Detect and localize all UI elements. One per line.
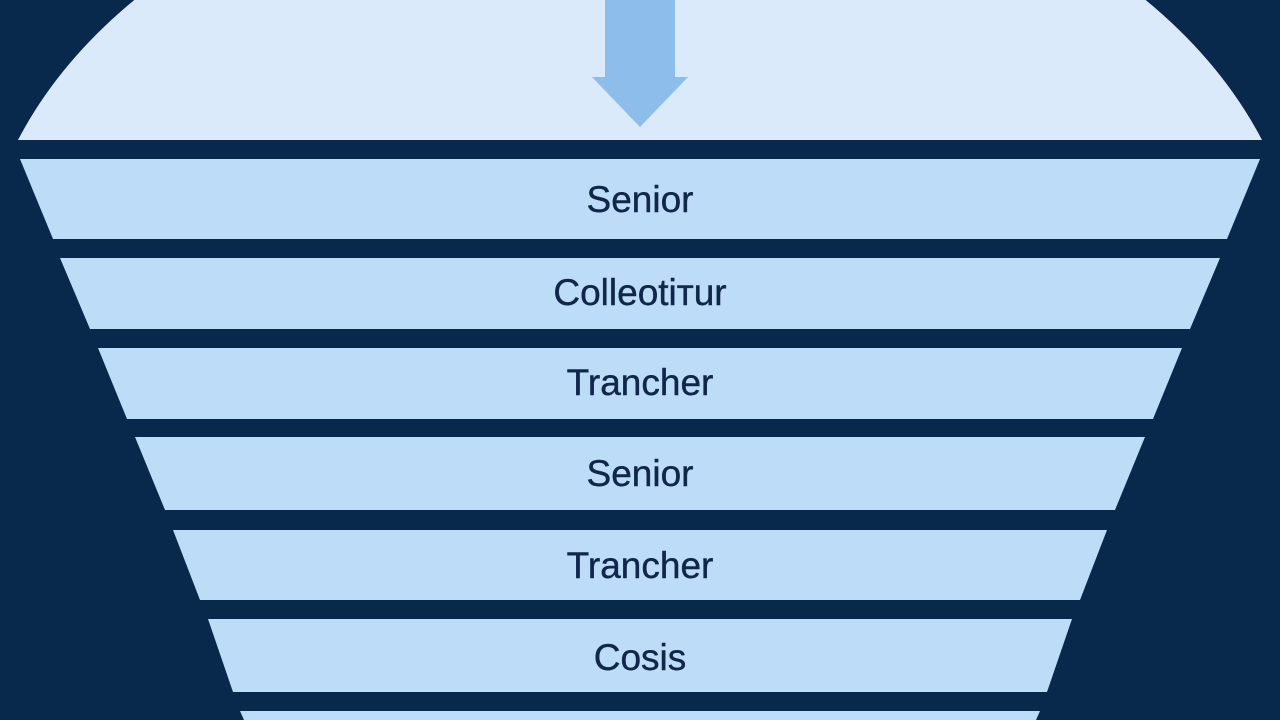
band 2: Colleotiтur [60,258,1220,329]
band 4: Senior [135,437,1145,510]
arrow: down [592,0,688,127]
band 2: Colleotiтur: Colleotiтur [553,272,727,313]
band 5: Trancher: Trancher [567,545,713,586]
band 3: Trancher [98,348,1182,419]
band 4: Senior: Senior [587,453,693,494]
band 1: Senior: Senior [587,179,693,220]
band 1: Senior [20,159,1260,239]
band 6: Cosis: Cosis [594,637,686,678]
band 3: Trancher: Trancher [567,362,713,403]
panel: top dome [18,0,1262,140]
band 5: Trancher [173,530,1107,600]
band 7 [240,711,1040,720]
band 6: Cosis [208,619,1072,692]
